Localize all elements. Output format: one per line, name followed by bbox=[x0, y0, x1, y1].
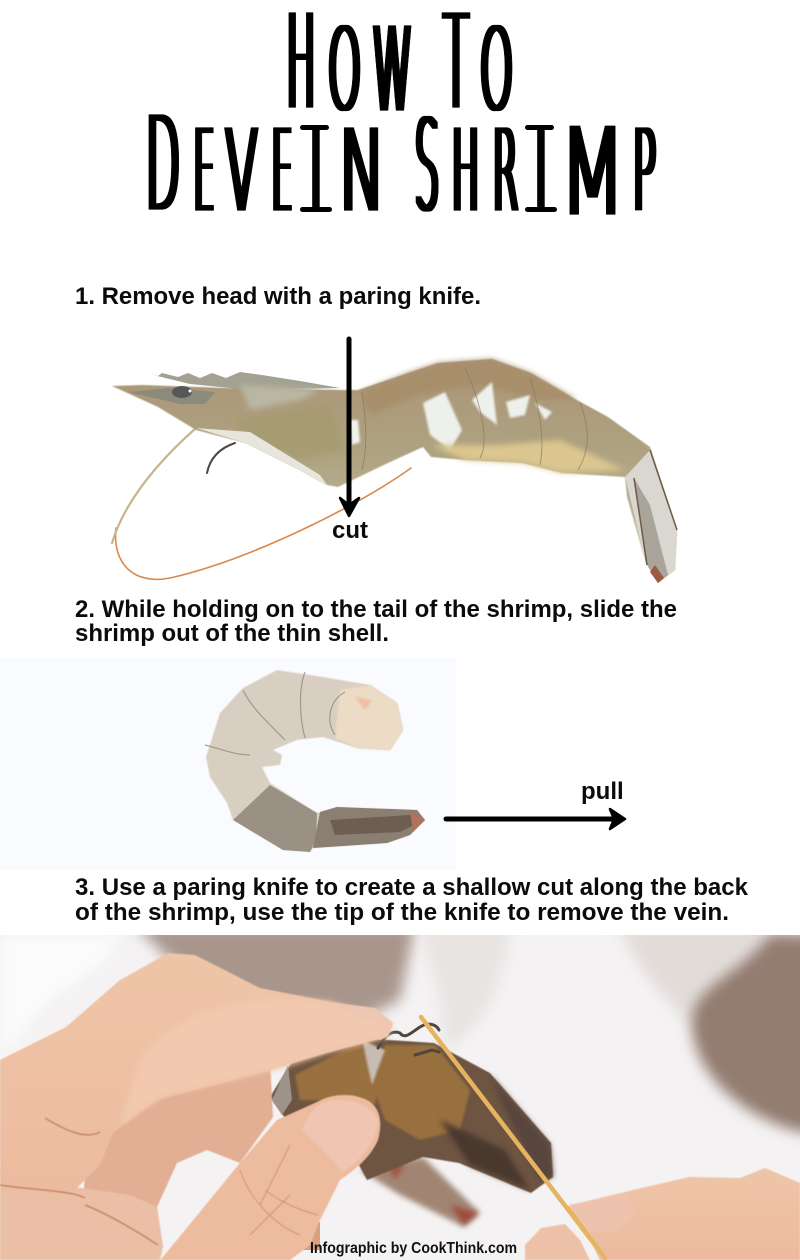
title: O bbox=[480, 6, 513, 136]
title: D bbox=[146, 90, 180, 240]
title: H bbox=[452, 107, 479, 237]
shrimp tail, blurred bbox=[360, 1157, 480, 1227]
title: I bbox=[310, 107, 322, 237]
step 3 text: 3. Use a paring knife to create a shallow cut along the back bbox=[75, 874, 749, 901]
curled fingers behind bbox=[80, 1060, 273, 1247]
title: I bbox=[535, 107, 547, 237]
title: W bbox=[372, 4, 412, 138]
tail fan bbox=[625, 450, 677, 583]
segment lines bbox=[362, 368, 587, 470]
shrimp body bbox=[270, 1038, 553, 1193]
step 3 text: of the shrimp, use the tip of the knife to remove the vein. bbox=[75, 899, 729, 926]
hand creases bbox=[0, 1118, 158, 1245]
title: N bbox=[340, 107, 384, 237]
blurred backdrop bbox=[0, 925, 800, 1260]
text: P bbox=[633, 107, 656, 237]
title: M bbox=[560, 104, 624, 243]
toothpick bbox=[421, 1017, 605, 1258]
photo backdrop bbox=[0, 658, 456, 870]
label: cut: cut bbox=[332, 517, 368, 544]
title: V bbox=[226, 107, 258, 237]
step 2 text: shrimp out of the thin shell. bbox=[75, 620, 389, 647]
right hand bbox=[525, 1168, 800, 1260]
head detail bbox=[128, 388, 215, 404]
arrow: pull bbox=[446, 809, 625, 829]
body bbox=[112, 359, 677, 583]
highlights bbox=[350, 382, 552, 450]
arrow: cut bbox=[340, 339, 359, 516]
step 3 text bbox=[75, 874, 749, 926]
vein bbox=[378, 1024, 439, 1055]
left hand bbox=[0, 953, 393, 1260]
lower palm bbox=[0, 1170, 163, 1260]
step 2 text bbox=[75, 596, 677, 647]
title: S bbox=[415, 94, 439, 239]
body bbox=[206, 670, 425, 852]
title: R bbox=[493, 107, 518, 237]
rostrum crest bbox=[145, 372, 340, 390]
photo: removing the vein bbox=[0, 925, 800, 1260]
title bbox=[146, 0, 656, 243]
finger behind thumb bbox=[298, 1220, 320, 1250]
photo: whole shrimp bbox=[112, 359, 677, 583]
photo: peeled shrimp bbox=[0, 658, 456, 870]
tail plate bbox=[233, 785, 317, 852]
title: E bbox=[194, 107, 214, 237]
index finger and back of hand bbox=[0, 953, 393, 1195]
step 2 text: 2. While holding on to the tail of the shrimp, slide the bbox=[75, 596, 677, 623]
title: E bbox=[272, 107, 292, 237]
step 1 text: 1. Remove head with a paring knife. bbox=[75, 283, 481, 310]
antennae bbox=[112, 428, 411, 579]
credit: Infographic by CookThink.com bbox=[310, 1240, 517, 1257]
label: pull: pull bbox=[581, 778, 624, 805]
thumb bbox=[160, 1095, 380, 1260]
underside bbox=[431, 440, 625, 473]
title: O bbox=[328, 6, 361, 136]
tail fan bbox=[313, 807, 425, 848]
back colour bbox=[360, 359, 577, 415]
